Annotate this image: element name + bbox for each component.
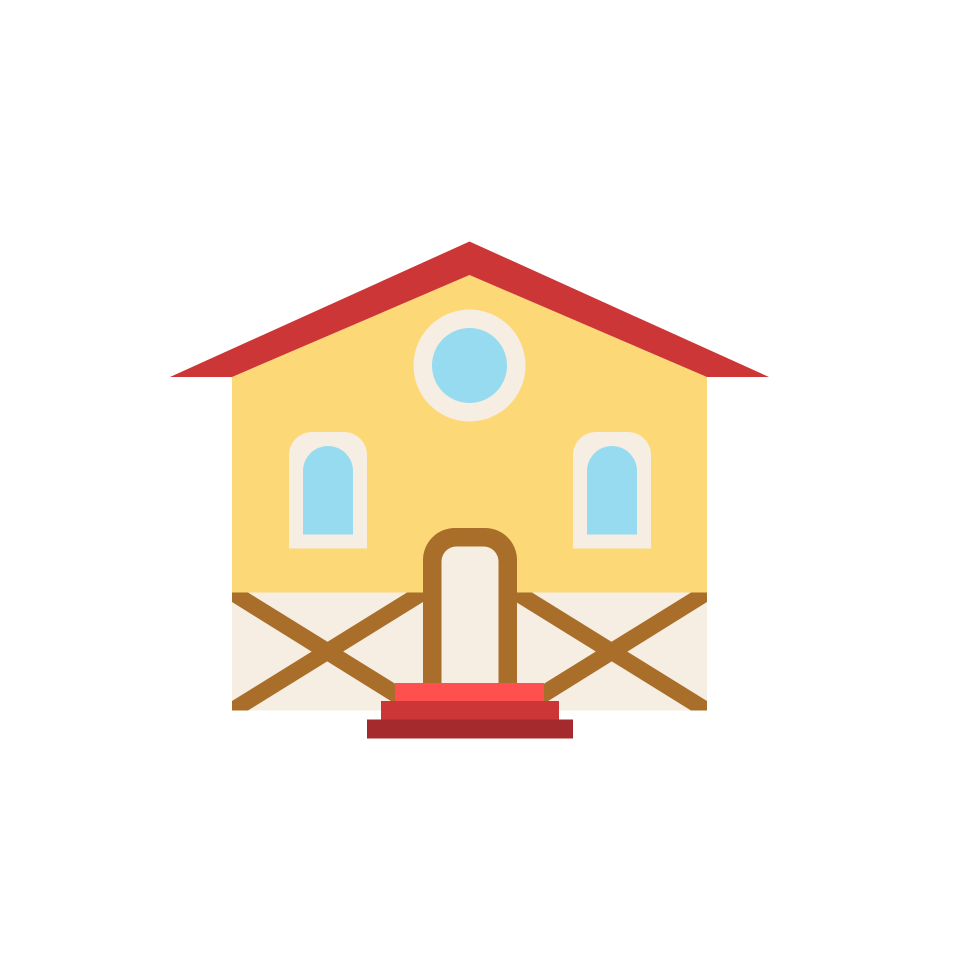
left cross beams <box>232 592 423 710</box>
roof <box>170 242 769 377</box>
round attic window <box>414 310 526 422</box>
upper wall <box>232 275 707 593</box>
lower wall <box>232 592 707 710</box>
right cross beams <box>516 592 707 710</box>
house <box>170 242 769 738</box>
steps <box>367 683 573 738</box>
door <box>423 528 517 690</box>
left arched window <box>289 432 367 548</box>
right arched window <box>573 432 651 548</box>
